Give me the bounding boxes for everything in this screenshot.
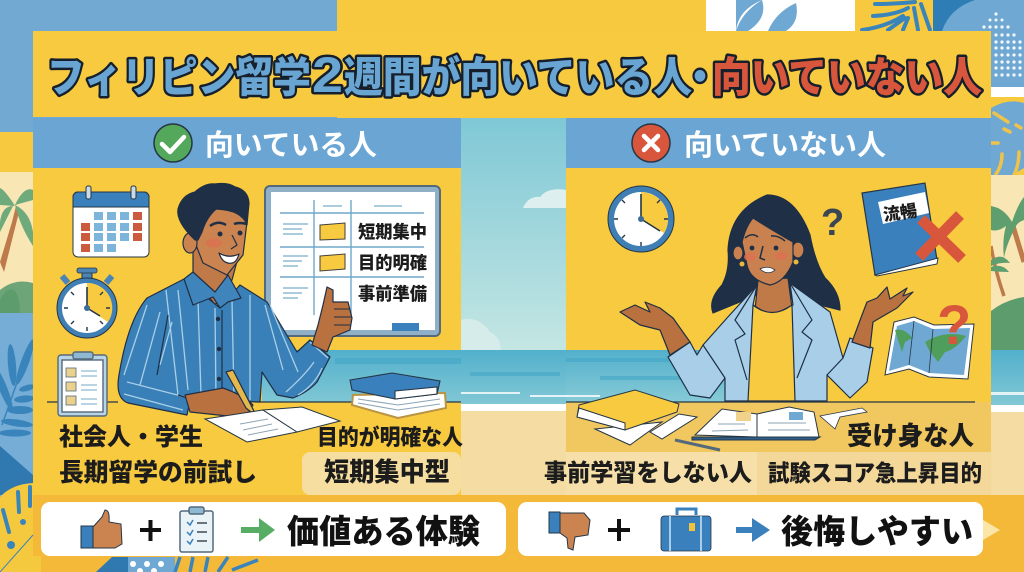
right header: 向いていない人 — [684, 129, 886, 162]
left panel body — [33, 168, 461, 495]
lower band — [566, 452, 757, 495]
question mark: ? — [821, 202, 844, 244]
title text blue: 2 — [312, 47, 343, 103]
whiteboard — [265, 186, 440, 336]
icon: clipboard — [180, 507, 213, 552]
man neck — [193, 238, 240, 305]
label: 事前学習をしない人: 事前学習をしない人 — [544, 459, 752, 487]
man shirt — [118, 279, 330, 415]
desk line — [47, 401, 461, 403]
title text blue: ・ — [681, 54, 719, 101]
icon: book with cross: 流暢 — [882, 200, 918, 225]
sand overlay — [302, 452, 461, 495]
title band — [33, 31, 991, 117]
plus — [140, 520, 161, 541]
notebook — [205, 407, 340, 442]
panel: suitable — [33, 118, 463, 495]
result text: 価値ある体験 — [287, 513, 480, 550]
whiteboard: 短期集中 — [358, 222, 427, 242]
pen — [675, 440, 720, 450]
arrow: blue — [736, 518, 770, 542]
icon: stopwatch — [57, 268, 117, 338]
label: 受け身な人: 受け身な人 — [847, 421, 974, 451]
result bar: good — [41, 502, 506, 556]
arrow: green — [241, 518, 275, 542]
icon: book with cross — [862, 183, 962, 276]
icon: calendar — [73, 186, 149, 257]
desk line — [566, 401, 975, 403]
man hair — [178, 183, 249, 240]
title text red: 向いていない人 — [712, 54, 982, 101]
icon: map with question — [885, 293, 974, 379]
left header — [33, 118, 461, 168]
whiteboard: 事前準備 — [358, 284, 427, 304]
icon: map with question: ? — [937, 293, 971, 356]
label: 目的が明確な人: 目的が明確な人 — [317, 425, 463, 450]
left header: 向いている人 — [205, 129, 377, 162]
fingers — [334, 309, 352, 325]
thumbs up — [312, 287, 352, 352]
title text blue — [47, 47, 719, 103]
icon: suitcase — [661, 509, 711, 551]
label: 社会人・学生: 社会人・学生 — [59, 423, 203, 451]
beach scene — [461, 118, 566, 350]
icon: clock — [608, 186, 674, 252]
lower band right — [757, 452, 991, 495]
yellow shirt — [748, 305, 795, 401]
woman illustration — [620, 195, 913, 401]
result text: 後悔しやすい — [781, 513, 973, 550]
woman neck — [755, 278, 792, 318]
label: 短期集中型: 短期集中型 — [324, 457, 450, 487]
icon: clipboard — [58, 352, 107, 416]
woman face — [733, 246, 743, 260]
bottom strip — [41, 495, 1024, 572]
woman arms — [620, 302, 690, 355]
title text blue: 週間が向いている人 — [344, 54, 692, 101]
desk band — [566, 402, 991, 452]
icon: thumb down — [549, 512, 590, 550]
right panel body — [566, 168, 991, 402]
open book — [692, 407, 820, 440]
man head — [196, 200, 247, 275]
right header — [566, 118, 991, 168]
label: 長期留学の前試し: 長期留学の前試し — [59, 458, 257, 487]
icon: thumb up — [81, 510, 122, 548]
woman hair — [712, 195, 840, 313]
plus — [608, 519, 630, 541]
man illustration — [118, 183, 352, 417]
panel: not suitable — [544, 118, 991, 495]
loose paper — [820, 408, 867, 429]
title text blue: フィリピン留学 — [47, 54, 311, 101]
whiteboard: 目的明確 — [358, 253, 427, 273]
blazer — [668, 283, 873, 401]
top-right decor — [706, 0, 855, 31]
lapels — [668, 283, 843, 380]
man hand writing — [185, 388, 253, 417]
result bar: bad — [518, 502, 1000, 556]
books — [350, 373, 446, 418]
yellow book — [577, 390, 697, 445]
label: 試験スコア急上昇目的: 試験スコア急上昇目的 — [768, 460, 982, 486]
